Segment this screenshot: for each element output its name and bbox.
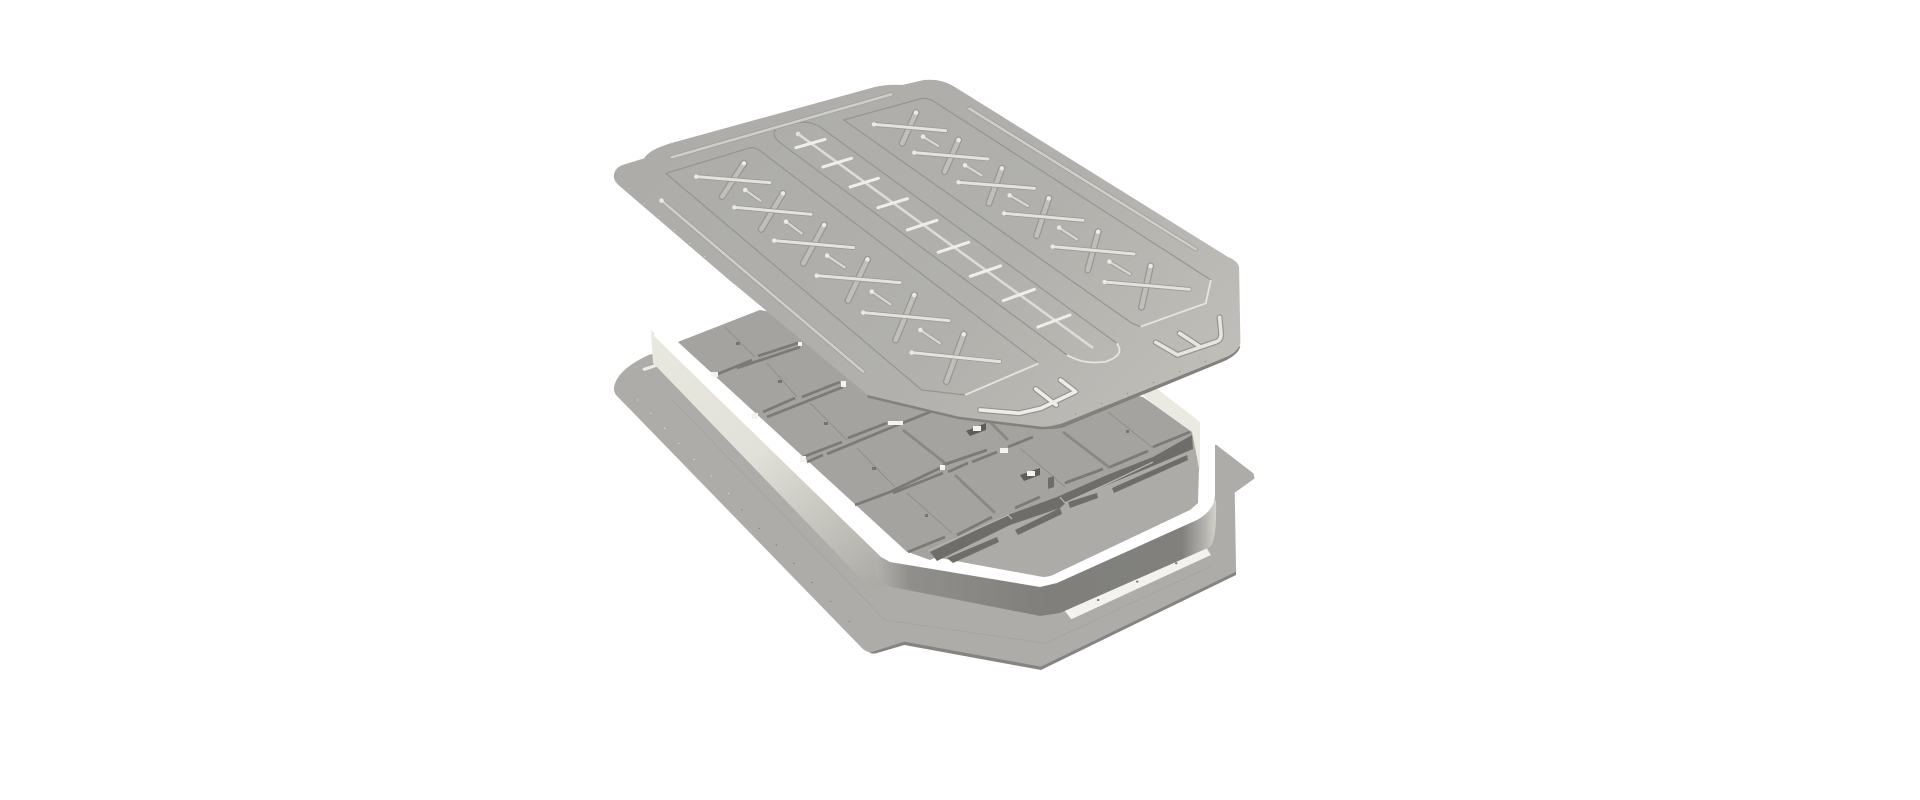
white mounting bracket on bottom plate — [1063, 547, 1211, 619]
edge ribs — [662, 94, 1196, 372]
light connector frames — [928, 462, 1153, 551]
horizontal arms of cross ribs — [696, 124, 1189, 362]
diagonal arms of cross ribs — [722, 113, 1151, 382]
dark connector ports — [966, 423, 1040, 481]
module column seams — [903, 422, 1110, 513]
pocket highlights — [965, 280, 1211, 395]
short ribs — [745, 137, 1130, 343]
module divider lines — [713, 343, 1190, 552]
bottom plate — [614, 353, 1255, 670]
rib end knobs — [662, 113, 1151, 353]
corner channel: right — [1156, 317, 1221, 355]
tray: floor — [678, 310, 1199, 577]
centre spine rib — [798, 134, 1092, 347]
edge rivets — [628, 188, 705, 257]
white connector blocks — [711, 342, 1008, 470]
front bus bars — [930, 435, 1193, 563]
module base surface — [678, 310, 1192, 560]
corner channel: bottom — [980, 380, 1076, 413]
top cover plate — [614, 80, 1240, 429]
plate thickness edge — [868, 346, 1240, 429]
module centre marks — [736, 342, 1129, 517]
centre cross bars — [796, 139, 1070, 327]
battery modules — [678, 310, 1193, 563]
tray: white rim — [653, 300, 1215, 587]
centre pocket — [774, 122, 1119, 362]
right pocket — [844, 98, 1211, 327]
tray: front outer wall — [875, 500, 1216, 616]
left pocket — [666, 148, 1039, 395]
tray: left outer wall — [651, 330, 886, 590]
tray: inner cream wall at far corner — [1143, 388, 1200, 470]
plate surface — [614, 80, 1240, 427]
